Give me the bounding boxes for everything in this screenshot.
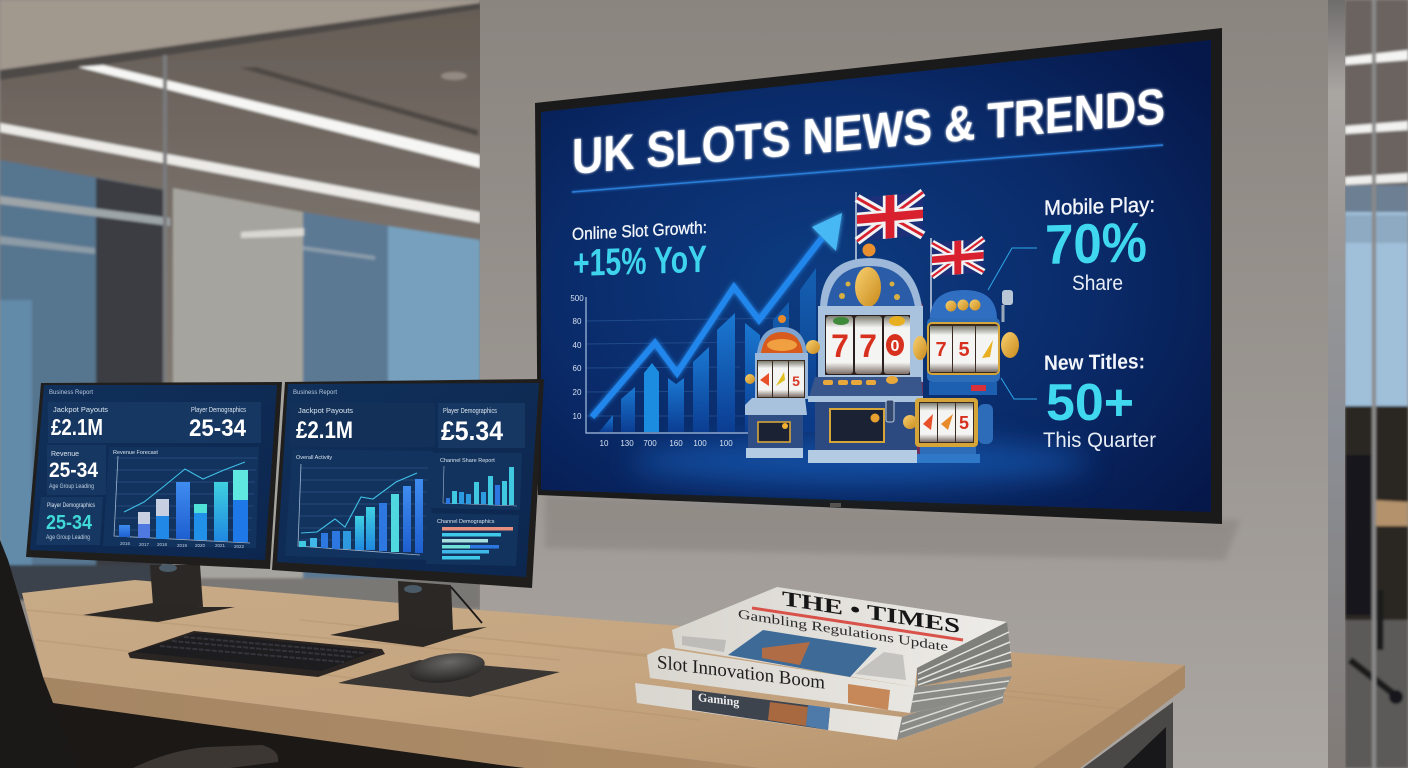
newspaper red rule	[752, 608, 963, 640]
left panel: player demographics: Player Demographics	[47, 502, 96, 509]
y axis labels: 20	[573, 388, 582, 397]
stat: new titles: This Quarter	[1043, 429, 1156, 452]
left panel: age group	[47, 445, 106, 495]
growth chart	[570, 213, 842, 448]
middle newspaper: Slot Innovation Boom	[657, 652, 825, 694]
slot machine: large centre: 7	[831, 328, 849, 364]
stat: online slot growth: Online Slot Growth:	[572, 218, 707, 244]
left panel: jackpot payouts: £2.1M	[51, 414, 103, 440]
right panel: player demographics: £5.34	[441, 416, 503, 446]
slot machine: lower right: 5	[959, 413, 969, 433]
left panel: bar chart: 2019	[177, 543, 188, 548]
stat: new titles	[1043, 350, 1156, 452]
y axis labels: 500	[570, 294, 584, 303]
flag: small union jack	[931, 238, 984, 322]
newspaper headline: Gambling Regulations Update	[738, 606, 948, 654]
right panel: horizontal bars: Channel Demographics	[437, 519, 495, 525]
pillar edge	[1328, 0, 1345, 768]
tv screen	[541, 40, 1211, 512]
chart bars	[599, 268, 816, 432]
right monitor header: Business Report	[293, 390, 337, 396]
right monitor screen	[277, 383, 539, 577]
stat: mobile play: 70%	[1045, 210, 1147, 276]
stat: mobile play: Mobile Play:	[1044, 194, 1155, 220]
left panel: bar chart: 2016	[120, 541, 131, 546]
right panel: player demographics	[438, 403, 525, 448]
left panel: player demographics: Age Group Leading	[46, 534, 90, 541]
x axis labels: 100	[693, 439, 707, 448]
y axis labels: 80	[573, 317, 582, 326]
x axis labels	[600, 439, 733, 448]
left panel: bar chart	[103, 447, 259, 549]
background: office interior seen through glass	[0, 0, 482, 608]
newspaper stack	[635, 586, 1012, 740]
right panel: small bar chart: Channel Share Report	[440, 458, 495, 464]
y axis labels: 60	[573, 364, 582, 373]
left monitor screen	[30, 385, 277, 560]
tv shadow on wall	[545, 495, 1240, 560]
stat: new titles: New Titles:	[1044, 350, 1145, 375]
title rule	[572, 145, 1163, 192]
stat: online slot growth	[572, 218, 707, 285]
wall	[480, 0, 1330, 768]
slot machine: large centre: 0	[891, 338, 900, 355]
right monitor stand	[330, 581, 487, 647]
stat: new titles: 50+	[1046, 374, 1134, 432]
left panel: age group: Age Group Leading	[49, 483, 94, 490]
slot machine: small left: 5	[792, 373, 800, 389]
left panel: bar chart: 2018	[157, 542, 168, 547]
flag: large union jack	[856, 192, 923, 262]
under-desk shadow	[40, 690, 560, 768]
tv logo	[830, 503, 841, 507]
desk leg	[1083, 702, 1173, 768]
top newspaper	[672, 586, 1012, 687]
desk side edge	[1033, 665, 1185, 768]
right glass partition and office beyond	[1345, 0, 1408, 768]
desk	[22, 580, 1185, 768]
x axis labels: 160	[669, 439, 683, 448]
callout line: new titles	[1001, 378, 1037, 399]
left panel: age group: Revenue	[51, 451, 79, 458]
x axis labels: 100	[719, 439, 733, 448]
left monitor header: Business Report	[49, 390, 93, 396]
middle newspaper	[647, 648, 1012, 713]
slot machine: large centre: 7	[859, 328, 877, 364]
y axis labels: 10	[573, 412, 582, 421]
wall-mounted TV	[535, 28, 1222, 524]
chair arm	[133, 745, 278, 768]
slot machine: lower right	[903, 398, 993, 463]
left panel: bar chart: Revenue Forecast	[113, 450, 158, 456]
bottom newspaper	[635, 683, 1005, 740]
left monitor	[26, 382, 282, 622]
mouse	[407, 649, 487, 687]
x axis labels: 10	[600, 439, 609, 448]
left panel: jackpot payouts: Player Demographics	[191, 405, 246, 414]
desk top	[22, 580, 1185, 768]
x axis labels: 700	[643, 439, 657, 448]
y axis labels	[570, 294, 584, 421]
left monitor stand	[83, 564, 235, 622]
desk front edge	[43, 677, 760, 768]
left panel: jackpot payouts: 25-34	[189, 415, 247, 442]
left panel: bar chart: 2021	[215, 543, 226, 548]
chart grid and axes	[586, 297, 790, 433]
left panel: jackpot payouts	[48, 402, 261, 443]
stat: mobile play	[1044, 194, 1155, 295]
left panel: jackpot payouts: Jackpot Payouts	[53, 405, 108, 414]
right panel: line and bar chart: Overall Activity	[296, 455, 332, 461]
left panel: bar chart: 2017	[139, 542, 150, 547]
left panel: player demographics	[36, 497, 103, 545]
keyboard	[128, 631, 385, 677]
right panel: line and bar chart	[285, 449, 433, 560]
right panel: player demographics: Player Demographics	[443, 408, 497, 415]
left panel: bar chart: 2022	[234, 544, 245, 549]
slot machine: upper right: 5	[958, 339, 970, 361]
right panel: jackpot payouts	[290, 403, 435, 447]
left panel: age group: 25-34	[49, 459, 98, 482]
right monitor frame	[272, 379, 544, 588]
slot machine: large centre	[806, 244, 923, 463]
tv frame	[535, 28, 1222, 524]
right monitor	[272, 379, 544, 647]
title: UK SLOTS NEWS & TRENDS	[572, 78, 1165, 185]
tv floor glow	[630, 440, 1090, 484]
left panel: bar chart: 2020	[195, 543, 206, 548]
office chair	[0, 540, 278, 768]
left monitor frame	[26, 382, 282, 569]
bottom newspaper: Gaming	[698, 690, 739, 709]
right panel: small bar chart	[430, 453, 522, 510]
growth arrow	[592, 213, 842, 417]
x axis labels: 130	[620, 439, 634, 448]
mouse pad	[338, 660, 560, 697]
stat: online slot growth: +15% YoY	[573, 239, 707, 285]
slot machine: upper right: 7	[935, 339, 947, 361]
right panel: jackpot payouts: Jackpot Payouts	[298, 406, 353, 415]
slot machine: small left	[745, 315, 808, 458]
left panel: player demographics: 25-34	[46, 512, 93, 534]
right panel: horizontal bars	[426, 513, 519, 566]
newspaper masthead: THE • TIMES	[782, 586, 960, 638]
stat: mobile play: Share	[1072, 272, 1123, 295]
y axis labels: 40	[573, 341, 582, 350]
callout line: mobile play	[988, 248, 1037, 290]
slot machine: upper right	[913, 290, 1019, 395]
right panel: jackpot payouts: £2.1M	[296, 417, 353, 444]
